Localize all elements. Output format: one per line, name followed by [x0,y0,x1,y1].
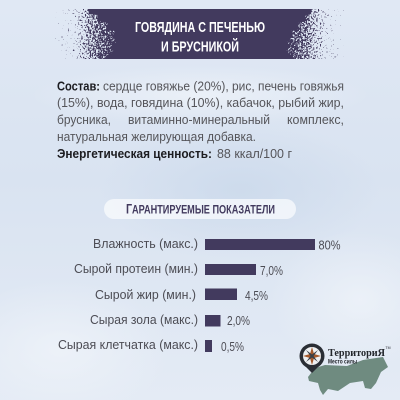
title text: ГОВЯДИНА С ПЕЧЕНЬЮ [135,20,265,36]
row: moisture [93,236,341,252]
logo wordmark [328,346,391,366]
bar chart: guaranteed values [58,236,341,354]
row: crude fat: Сырой жир (мин.) [95,287,196,302]
logo wordmark: ТерриториЯ [328,347,385,359]
composition text block: натуральная желирующая добавка. [57,129,256,144]
row: crude fibre: 0,5% [221,339,244,354]
logo wordmark: ТМ [386,346,391,350]
row: crude ash [90,312,250,328]
title text [135,20,265,56]
composition text block: сердце говяжье (20%), рис, печень говяжья [103,78,344,94]
section heading pill [104,199,296,219]
row: crude fat [95,287,268,303]
title banner [55,9,345,59]
icon: compass pin [300,344,324,373]
composition text block: Состав: [57,78,100,94]
row: crude protein: 7,0% [260,263,283,278]
composition text block: брусника, [57,112,111,127]
logo wordmark: Место силы [328,358,357,366]
row: crude fibre: Сырая клетчатка (макс.) [58,337,198,352]
title text: И БРУСНИКОЙ [161,38,239,56]
composition text block: 88 ккал/100 г [217,146,292,161]
row: crude protein: Сырой протеин (мин.) [74,261,198,276]
row: moisture: 80% [318,238,341,252]
logo: Territoriya [300,344,391,395]
composition text block: (15%), вода, говядина (10%), кабачок, рыбий жир, [57,95,344,110]
composition text block: комплекс, [287,112,344,127]
map of Russia [308,357,388,395]
row: crude fibre [58,337,244,354]
section heading pill: ГАРАНТИРУЕМЫЕ ПОКАЗАТЕЛИ [126,200,275,216]
composition text block: витаминно-минеральный [128,112,270,127]
composition text block: Энергетическая ценность: [57,146,212,161]
row: moisture: Влажность (макс.) [93,236,198,251]
row: crude protein [74,261,283,278]
row: crude fat: 4,5% [245,288,268,303]
row: crude ash: 2,0% [227,313,250,328]
composition text block [57,78,344,161]
row: crude ash: Сырая зола (макс.) [90,312,198,327]
